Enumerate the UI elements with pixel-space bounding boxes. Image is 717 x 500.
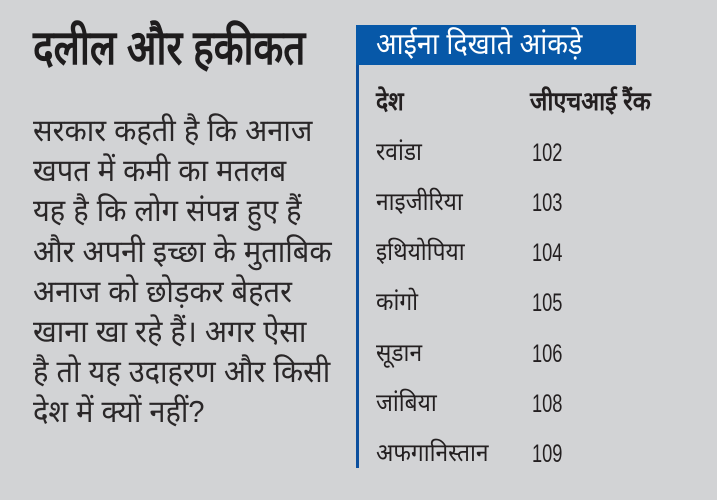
row: Rwanda: 102 [532, 139, 562, 167]
text block: argument: खाना खा रहे हैं। अगर ऐसा [33, 314, 306, 349]
row: Afghanistan: अफगानिस्तान [376, 439, 488, 467]
panel heading text: आईना दिखाते आंकड़े [376, 28, 582, 61]
panel: GHI rank table [356, 25, 652, 468]
row: Sudan [376, 339, 562, 368]
row: Ethiopia: 104 [532, 239, 562, 267]
row: Ethiopia [376, 238, 562, 267]
row: Rwanda: रवांडा [376, 138, 422, 166]
row: Rwanda [376, 138, 562, 167]
text block: argument: है तो यह उदाहरण और किसी [33, 354, 330, 389]
row: Ethiopia: इथियोपिया [376, 238, 465, 266]
row: Afghanistan: 109 [532, 440, 562, 468]
row: Zambia: 108 [532, 390, 562, 418]
row: Zambia [376, 388, 562, 418]
row: Congo [376, 288, 562, 317]
row: Congo: कांगो [376, 288, 418, 316]
text block: argument: अनाज को छोड़कर बेहतर [33, 274, 292, 309]
column header: country: देश [376, 86, 404, 116]
text block: argument [33, 113, 332, 429]
row: Afghanistan [376, 438, 562, 468]
text block: argument: सरकार कहती है कि अनाज [33, 113, 312, 148]
row: Congo: 105 [532, 289, 562, 317]
title: दलील और हकीकत [33, 22, 305, 75]
row: Sudan: 106 [532, 340, 562, 368]
row: Zambia: जांबिया [376, 389, 437, 417]
column header: GHI rank: जीएचआई रैंक [530, 86, 651, 116]
panel left rule [356, 25, 359, 468]
text block: argument: यह है कि लोग संपन्न हुए हैं [33, 193, 302, 228]
row: Nigeria [376, 188, 562, 217]
text block: argument: देश में क्यों नहीं? [33, 394, 205, 429]
text block: argument: और अपनी इच्छा के मुताबिक [33, 234, 332, 269]
text block: argument: खपत में कमी का मतलब [33, 153, 286, 188]
panel heading bar [356, 25, 636, 65]
row: Nigeria: नाइजीरिया [376, 188, 463, 216]
row: Sudan: सूडान [376, 339, 422, 367]
row: Nigeria: 103 [532, 189, 562, 217]
